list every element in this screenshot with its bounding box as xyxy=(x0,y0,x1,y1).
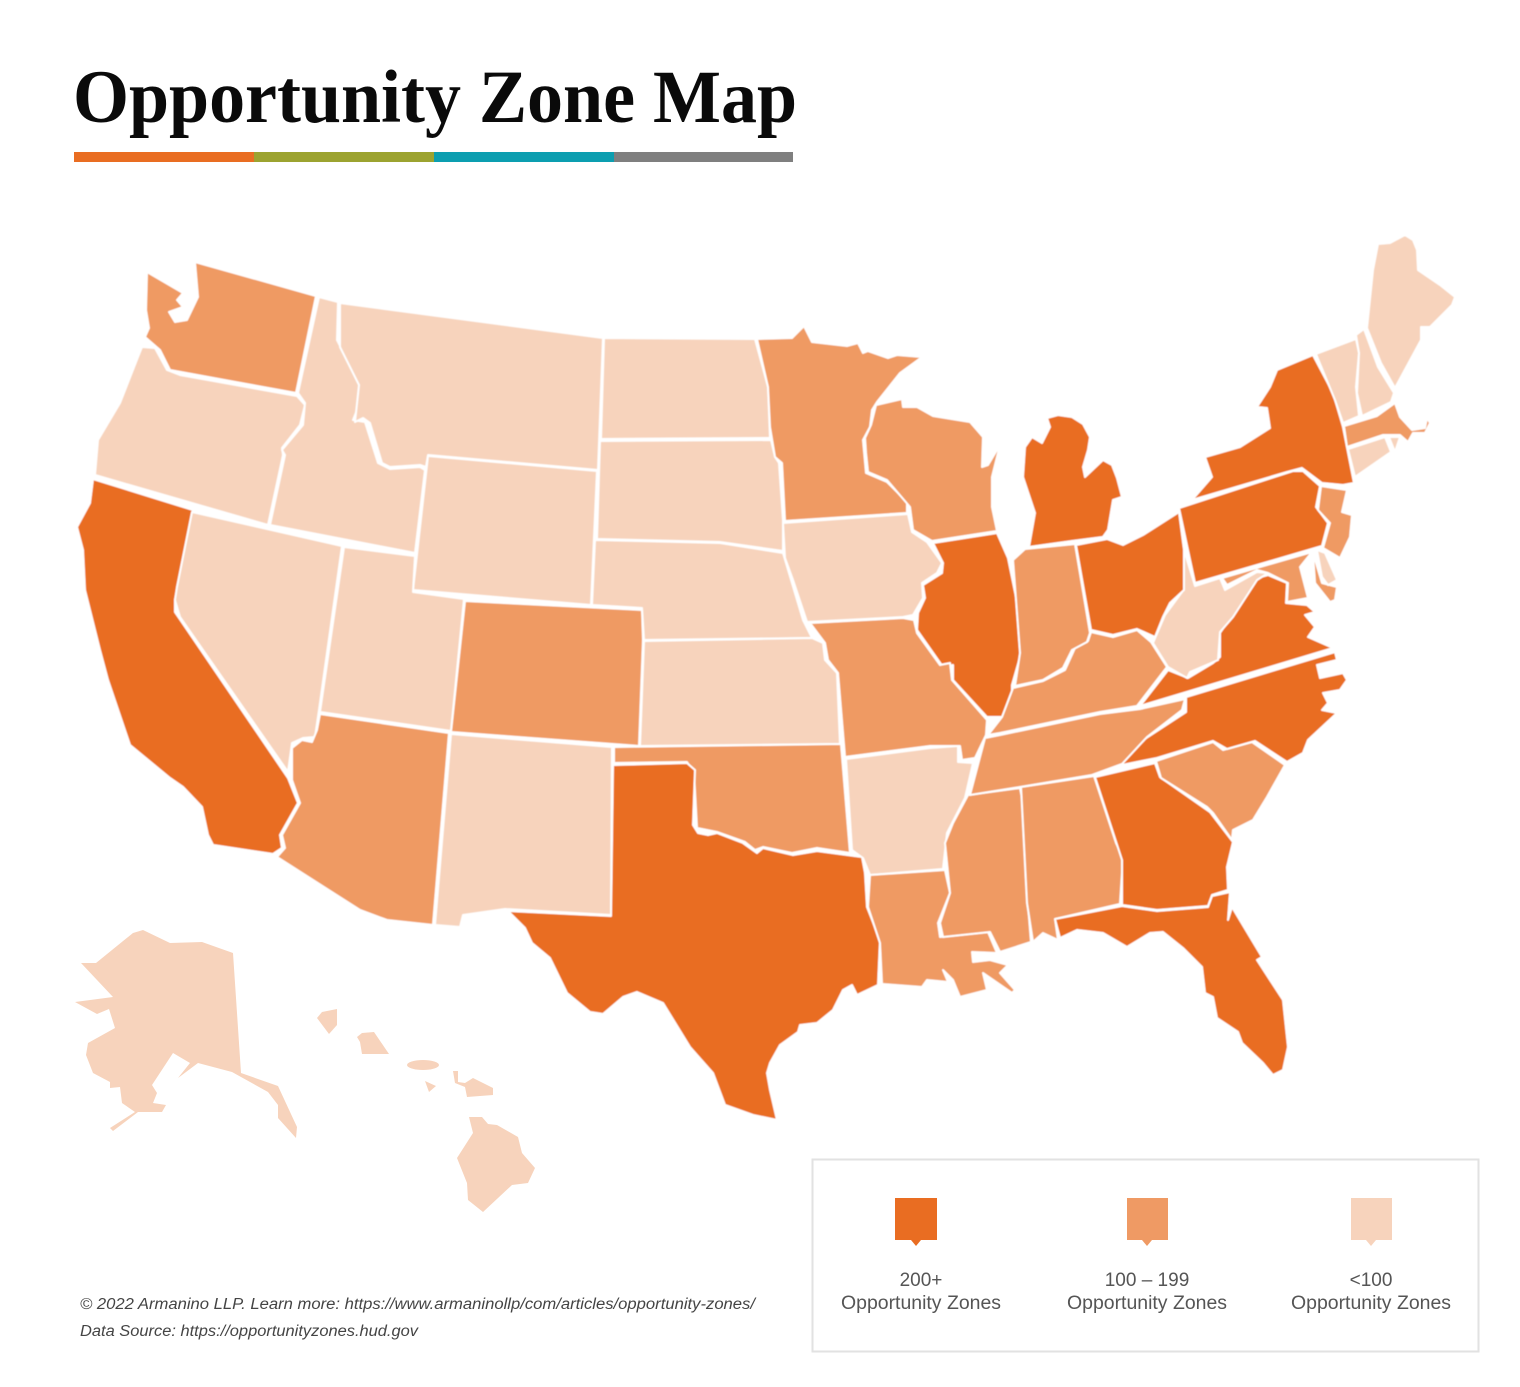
state: Nevada xyxy=(175,512,342,772)
state: Iowa xyxy=(783,514,942,622)
state: Alaska xyxy=(75,930,297,1138)
title: Opportunity Zone Map xyxy=(73,56,797,139)
legend item: 200+ xyxy=(841,1198,1001,1314)
state: Idaho xyxy=(270,297,425,553)
state: Minnesota xyxy=(757,326,922,521)
source note xyxy=(80,1296,757,1340)
state: Kentucky xyxy=(988,630,1167,735)
state: Louisiana xyxy=(868,870,1015,997)
state: Illinois xyxy=(917,533,1022,717)
state: Wisconsin xyxy=(865,399,1000,541)
state: Rhode Island xyxy=(1389,437,1400,452)
state: New York xyxy=(1192,355,1354,500)
state: Missouri xyxy=(810,618,987,760)
state: Michigan xyxy=(1023,415,1122,547)
legend item: 100 to 199: 100 – 199 xyxy=(1105,1270,1189,1291)
state: Pennsylvania xyxy=(1179,471,1328,583)
state: Indiana xyxy=(1013,544,1090,686)
state: Georgia xyxy=(1095,763,1233,910)
state: Mississippi xyxy=(940,788,1031,952)
state: Vermont xyxy=(1316,339,1359,423)
source note: © 2022 Armanino LLP. Learn more: https://www.armaninollp/com/articles/opportunity-zones/ xyxy=(80,1296,757,1313)
state: Maryland xyxy=(1222,552,1312,602)
state: Massachusetts xyxy=(1344,403,1430,447)
state: Oklahoma xyxy=(614,744,850,853)
state: Kansas xyxy=(640,638,840,746)
state: South Carolina xyxy=(1156,742,1285,840)
state: West Virginia xyxy=(1153,550,1268,678)
state: Arizona xyxy=(277,714,449,925)
state: New Mexico xyxy=(435,734,612,927)
state: Wyoming xyxy=(413,456,597,605)
state: New Jersey xyxy=(1318,486,1352,558)
state: South Dakota xyxy=(597,440,783,551)
state: Ohio xyxy=(1076,512,1184,637)
legend item: 100 to 199: Opportunity Zones xyxy=(1067,1293,1227,1314)
legend item: under 100: Opportunity Zones xyxy=(1291,1293,1451,1314)
state: North Carolina xyxy=(1122,652,1347,765)
state: Hawaii xyxy=(317,1009,535,1212)
state: Washington xyxy=(145,262,316,393)
state: California xyxy=(77,479,298,854)
state: Colorado xyxy=(451,601,643,746)
state: Maine xyxy=(1367,235,1455,388)
title colour bar xyxy=(74,152,793,162)
state: Nebraska xyxy=(592,540,812,640)
state: Florida xyxy=(1055,892,1288,1075)
state: Texas xyxy=(508,763,880,1120)
state: Montana xyxy=(340,303,603,470)
map: contiguous United States xyxy=(77,235,1455,1120)
legend item: under 100 xyxy=(1291,1198,1451,1314)
state: Oregon xyxy=(95,347,305,525)
state: Connecticut xyxy=(1348,437,1391,477)
state: North Dakota xyxy=(601,338,770,439)
state: Tennessee xyxy=(970,699,1185,795)
legend item: 100 to 199 xyxy=(1067,1198,1227,1314)
state: Virginia xyxy=(1140,575,1333,706)
legend item: 200+: 200+ xyxy=(900,1270,942,1291)
legend xyxy=(812,1160,1478,1352)
state: New Hampshire xyxy=(1356,329,1394,416)
state: Maryland eastern shore xyxy=(1313,553,1337,602)
state: Utah xyxy=(320,547,464,731)
state: Arkansas xyxy=(846,746,973,875)
state: Delaware xyxy=(1317,550,1337,585)
state: Alabama xyxy=(1021,776,1123,942)
source note: Data Source: https://opportunityzones.hud.gov xyxy=(80,1323,419,1340)
legend item: under 100: <100 xyxy=(1350,1270,1392,1291)
legend item: 200+: Opportunity Zones xyxy=(841,1293,1001,1314)
